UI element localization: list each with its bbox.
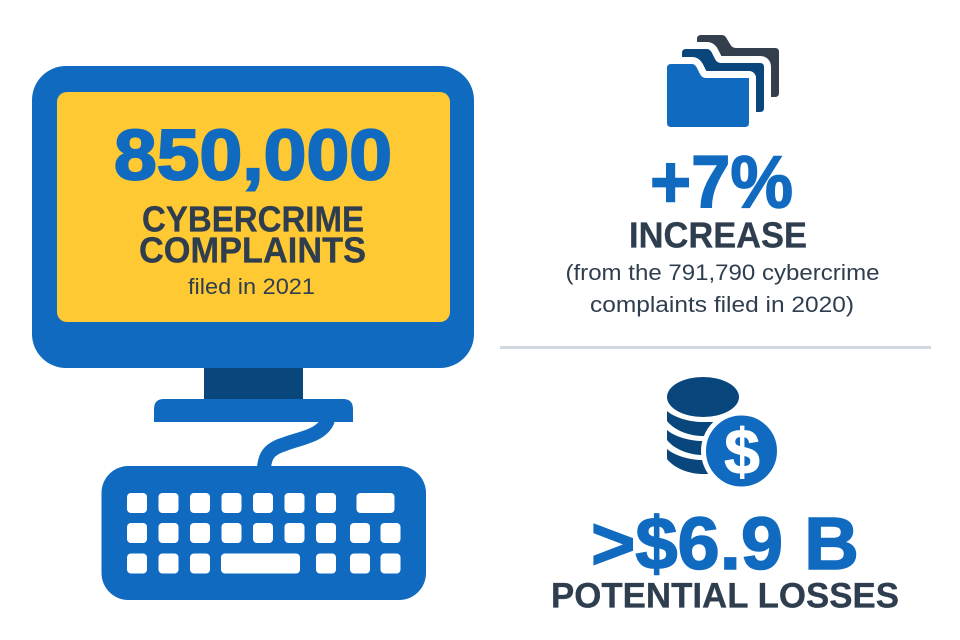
back folder: [697, 35, 779, 97]
dollar circle: [704, 413, 780, 489]
text: comparison with 2020: complaints filed in 2020): [590, 292, 854, 317]
label: potential losses: POTENTIAL LOSSES: [551, 576, 899, 616]
label: cybercrime: CYBERCRIME: [142, 198, 364, 240]
coin stack: [667, 377, 745, 474]
icon: folders: [667, 35, 779, 127]
stat: +7%: +7%: [650, 140, 793, 224]
monitor body: [32, 66, 474, 368]
middle folder: [682, 49, 764, 112]
text: comparison with 2020: [566, 260, 880, 317]
stat: over 6.9 billion: >$6.9 B: [591, 502, 859, 585]
keyboard: [102, 466, 426, 600]
text: comparison with 2020: (from the 791,790 cybercrime: [566, 260, 880, 285]
monitor screen: [57, 92, 450, 322]
label: complaints: COMPLAINTS: [139, 230, 366, 270]
monitor base: [154, 399, 353, 422]
icon: coins with dollar: [667, 377, 780, 489]
keyboard cable: [264, 420, 328, 468]
front folder: [667, 64, 749, 127]
label: increase: INCREASE: [629, 214, 807, 256]
stat: 850,000: 850,000: [114, 116, 392, 196]
monitor stand: [204, 366, 303, 400]
icon: computer with keyboard: [32, 66, 474, 600]
label: filed in 2021: filed in 2021: [188, 274, 315, 299]
dollar sign: $: [724, 416, 760, 488]
